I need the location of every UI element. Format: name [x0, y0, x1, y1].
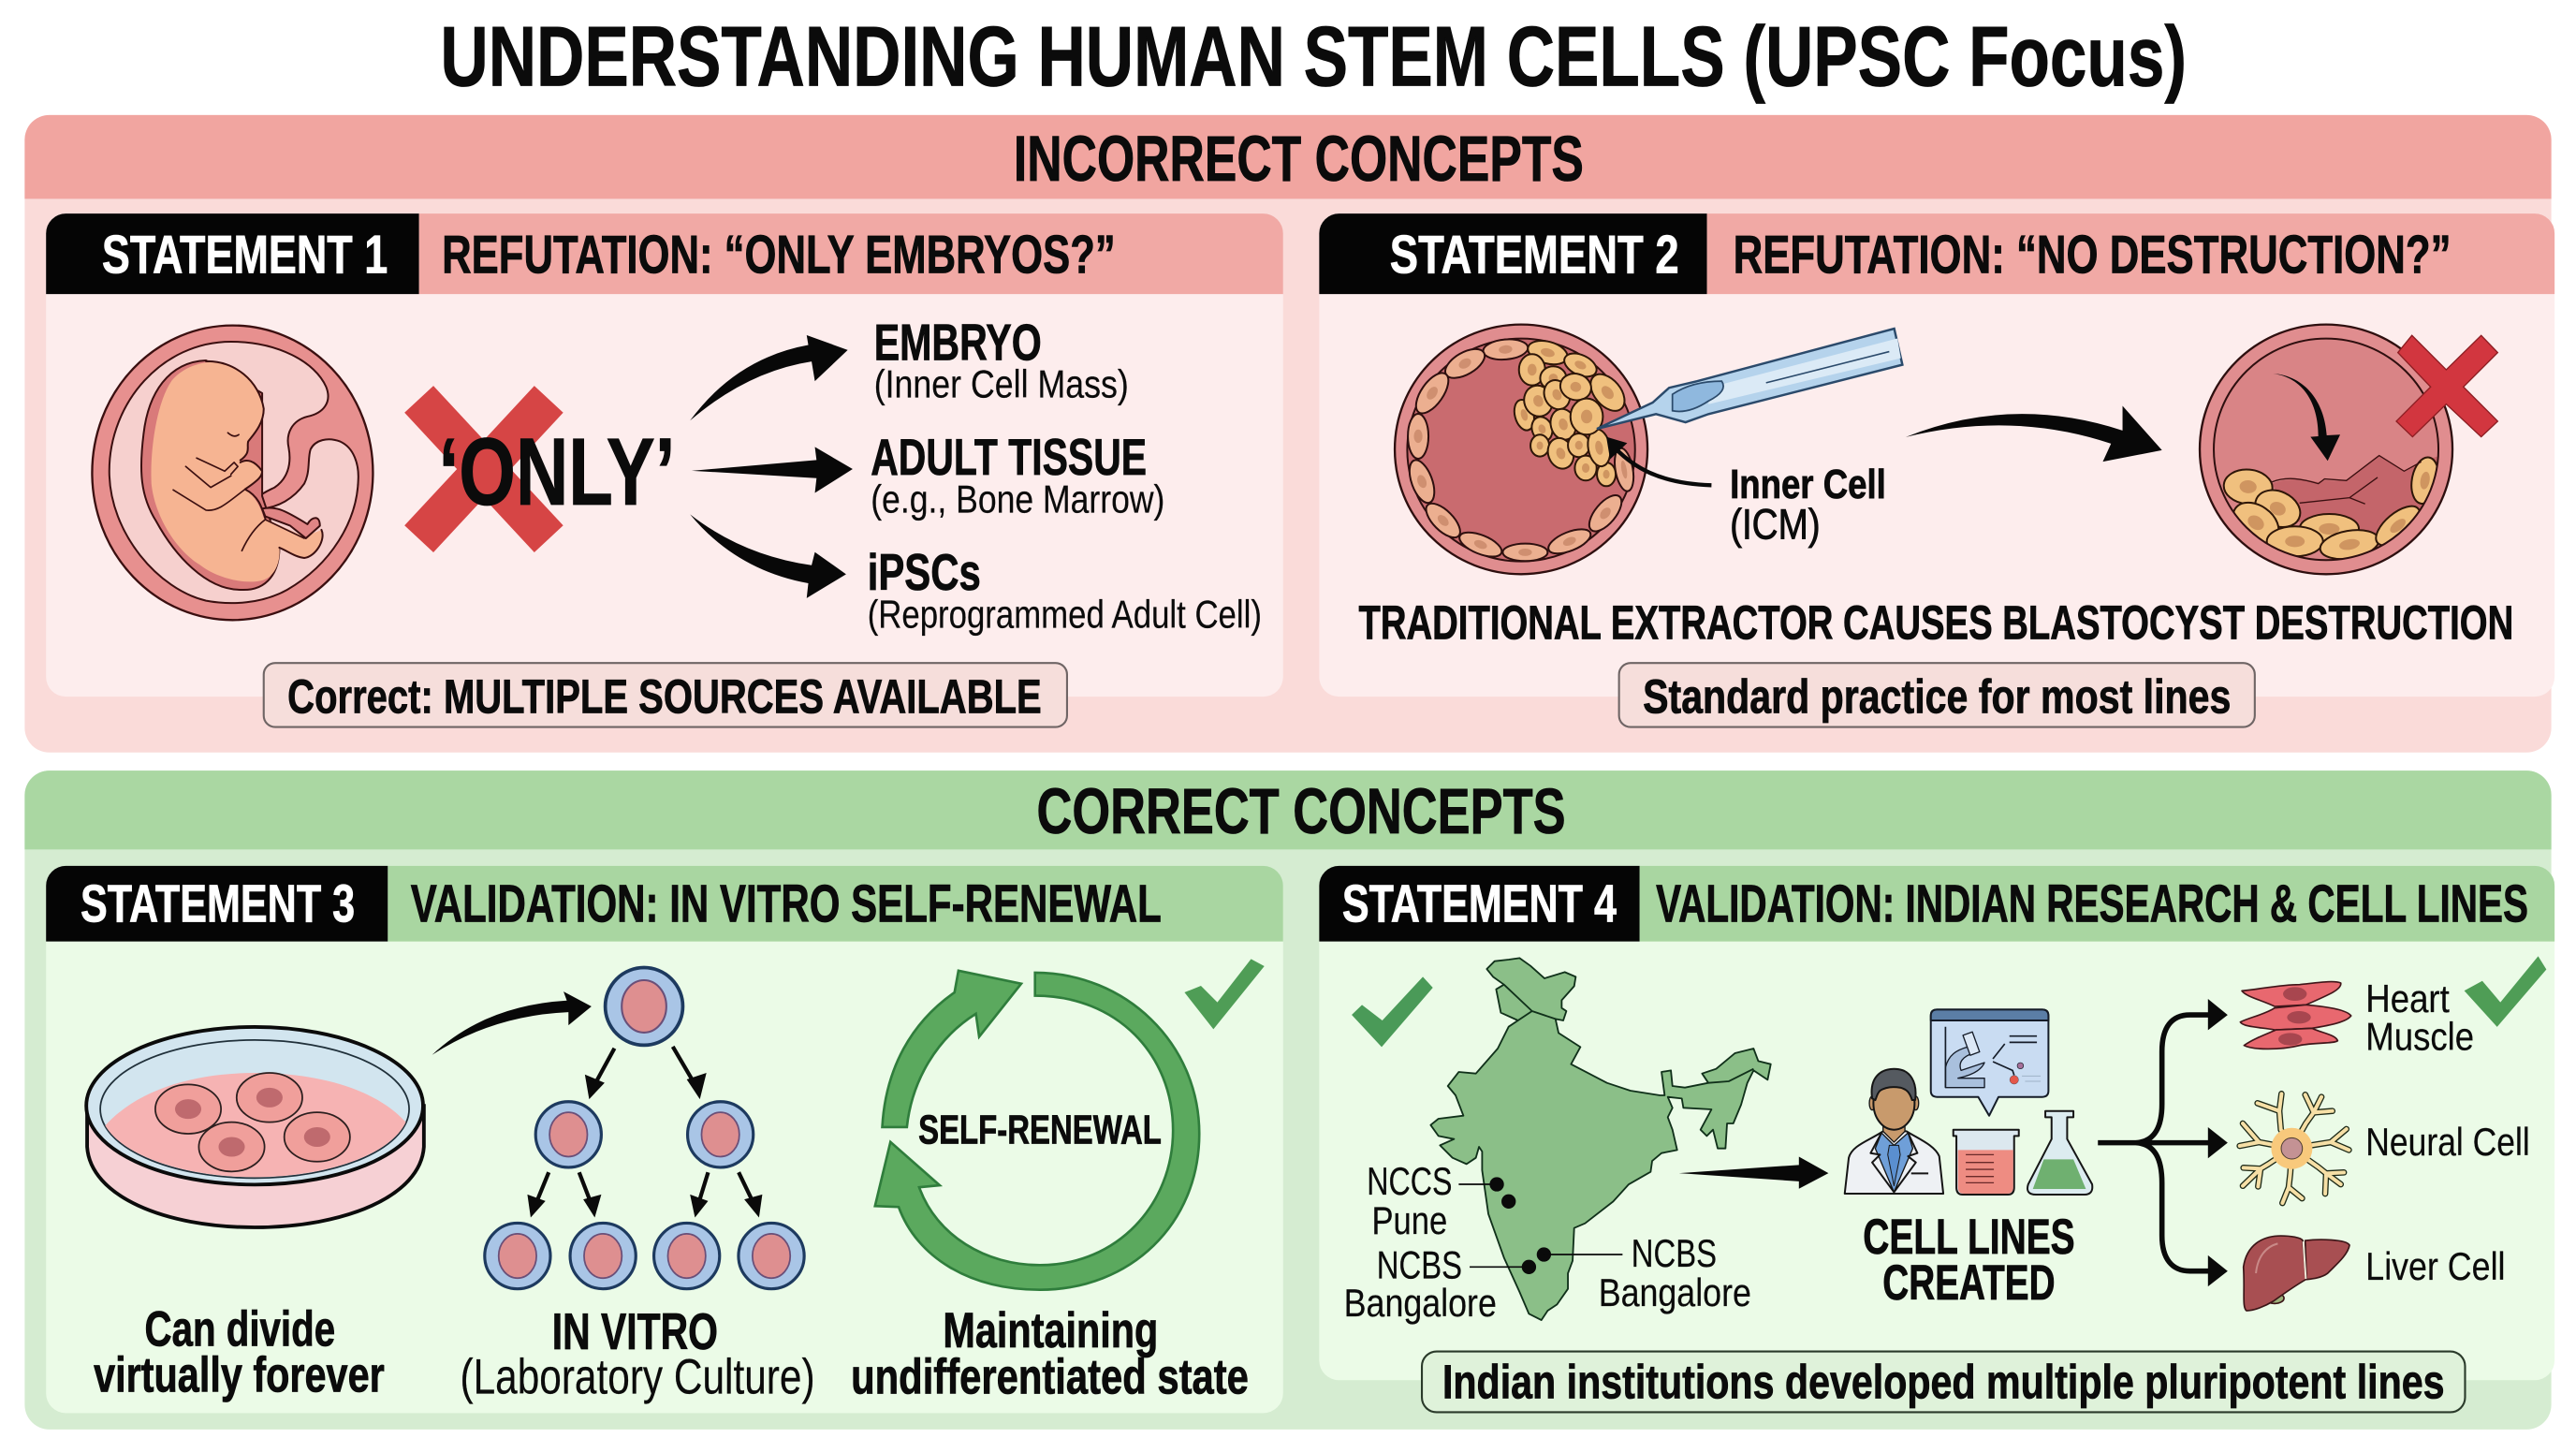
only label: ‘ONLY’ [439, 418, 675, 525]
label: liver cell: Liver Cell [2365, 1244, 2505, 1288]
label: NCBS Bangalore right: Bangalore [1599, 1270, 1751, 1314]
caption: cell lines created: CELL LINES [1863, 1210, 2075, 1265]
caption: divide forever [94, 1301, 385, 1403]
label: inner cell: Inner Cell [1730, 462, 1886, 507]
arrow: extraction leads to destruction [1906, 405, 2162, 462]
arrow: map to lab [1679, 1157, 1828, 1189]
source: iPSCs: iPSCs [868, 544, 981, 601]
icon: intact blastocyst [1395, 325, 1647, 574]
label: NCBS Bangalore left: NCBS [1377, 1242, 1462, 1286]
label: inner cell [1730, 462, 1886, 549]
icon: petri dish [86, 1027, 424, 1227]
heading: incorrect concepts [24, 115, 2552, 198]
icon: red X [419, 399, 549, 539]
icon: flask [2027, 1111, 2092, 1195]
panel: statement 2 [1319, 213, 2554, 727]
label: self-renewal: SELF-RENEWAL [918, 1107, 1162, 1152]
label: NCCS Pune: Pune [1372, 1198, 1447, 1242]
caption: cell lines created: CREATED [1882, 1255, 2056, 1311]
icon: red X on blastocyst [2396, 335, 2497, 437]
callout: standard practice: Standard practice for most lines [1643, 670, 2231, 724]
refutation heading 1: REFUTATION: “ONLY EMBRYOS?” [442, 225, 1116, 285]
icon: speech bubble with microscope [1931, 1009, 2048, 1116]
icon: self-renewal cycle [875, 971, 1199, 1290]
statement 4 label [1319, 866, 1640, 942]
caption: undifferentiated [851, 1303, 1249, 1404]
arrows: three sources [690, 335, 853, 598]
source: embryo [874, 314, 1129, 406]
arrow: dish to cell [432, 991, 592, 1055]
icon: check mark 3 [1184, 959, 1265, 1029]
icon: liver [2244, 1236, 2349, 1311]
chart: cell division tree [485, 968, 804, 1289]
statement 1 label: STATEMENT 1 [102, 225, 388, 285]
caption: in vitro: IN VITRO [552, 1303, 718, 1360]
caption: undifferentiated: Maintaining [943, 1303, 1158, 1358]
source: embryo: EMBRYO [874, 314, 1042, 371]
label: NCBS Bangalore right: NCBS [1632, 1231, 1717, 1275]
callout: multiple sources: Correct: MULTIPLE SOURCES AVAILABLE [287, 670, 1042, 724]
callout: standard practice [1619, 663, 2255, 727]
statement 2 label: STATEMENT 2 [1390, 225, 1679, 285]
caption: undifferentiated: undifferentiated state [851, 1349, 1249, 1404]
icon: destroyed blastocyst [2200, 325, 2452, 574]
label: NCBS Bangalore left: Bangalore [1344, 1281, 1497, 1325]
icon: beaker [1954, 1130, 2019, 1195]
panel: statement 3 [46, 866, 1283, 1413]
map markers [1458, 1177, 1622, 1274]
label: NCCS Pune [1367, 1159, 1453, 1242]
icon: check mark 4 right [2465, 956, 2546, 1027]
heading: correct concepts: CORRECT CONCEPTS [1036, 775, 1566, 847]
label: NCCS Pune: NCCS [1367, 1159, 1453, 1203]
map: India [1430, 958, 1771, 1320]
callout arrow: inner cell [1606, 437, 1711, 485]
statement 1 label [46, 213, 419, 294]
caption: divide forever: Can divide [145, 1301, 335, 1357]
label: heart muscle [2365, 976, 2474, 1058]
panel: correct concepts [24, 770, 2554, 1430]
icon: embryo in womb [92, 326, 373, 620]
panel: statement 4 [1319, 866, 2554, 1412]
statement 3 label: STATEMENT 3 [80, 874, 355, 933]
icon: pipette extractor [1597, 329, 1902, 429]
label: heart muscle: Muscle [2365, 1014, 2474, 1058]
label: NCBS Bangalore right [1599, 1231, 1751, 1314]
caption: in vitro: (Laboratory Culture) [460, 1349, 815, 1404]
heading: correct concepts [24, 770, 2552, 849]
source: adult tissue: ADULT TISSUE [871, 429, 1147, 486]
label: neural cell: Neural Cell [2365, 1120, 2530, 1164]
source: adult tissue: (e.g., Bone Marrow) [871, 477, 1164, 521]
source: iPSCs: (Reprogrammed Adult Cell) [868, 592, 1262, 636]
source: adult tissue [871, 429, 1164, 521]
validation heading 3: VALIDATION: IN VITRO SELF-RENEWAL [411, 874, 1162, 933]
heading: incorrect concepts: INCORRECT CONCEPTS [1014, 123, 1584, 195]
caption: divide forever: virtually forever [94, 1348, 385, 1403]
panel: incorrect concepts [24, 115, 2554, 753]
source: iPSCs [868, 544, 1262, 636]
callout: multiple sources [264, 663, 1067, 727]
icon: neural cell [2240, 1093, 2349, 1203]
label: inner cell: (ICM) [1730, 501, 1821, 549]
arrows: cell line branches [2098, 999, 2228, 1286]
source: embryo: (Inner Cell Mass) [874, 362, 1129, 406]
caption: cell lines created [1863, 1210, 2075, 1311]
label: NCBS Bangalore left [1344, 1242, 1497, 1325]
label: heart muscle: Heart [2365, 976, 2450, 1020]
statement 2 label [1319, 213, 1707, 294]
statement 3 label [46, 866, 388, 942]
icon: heart muscle cells [2240, 982, 2351, 1049]
icon: scientist [1845, 1069, 1943, 1194]
caption: in vitro [460, 1303, 815, 1404]
statement 4 label: STATEMENT 4 [1342, 874, 1617, 933]
panel: statement 1 [46, 213, 1283, 727]
icon: check mark 4 left [1352, 976, 1433, 1047]
